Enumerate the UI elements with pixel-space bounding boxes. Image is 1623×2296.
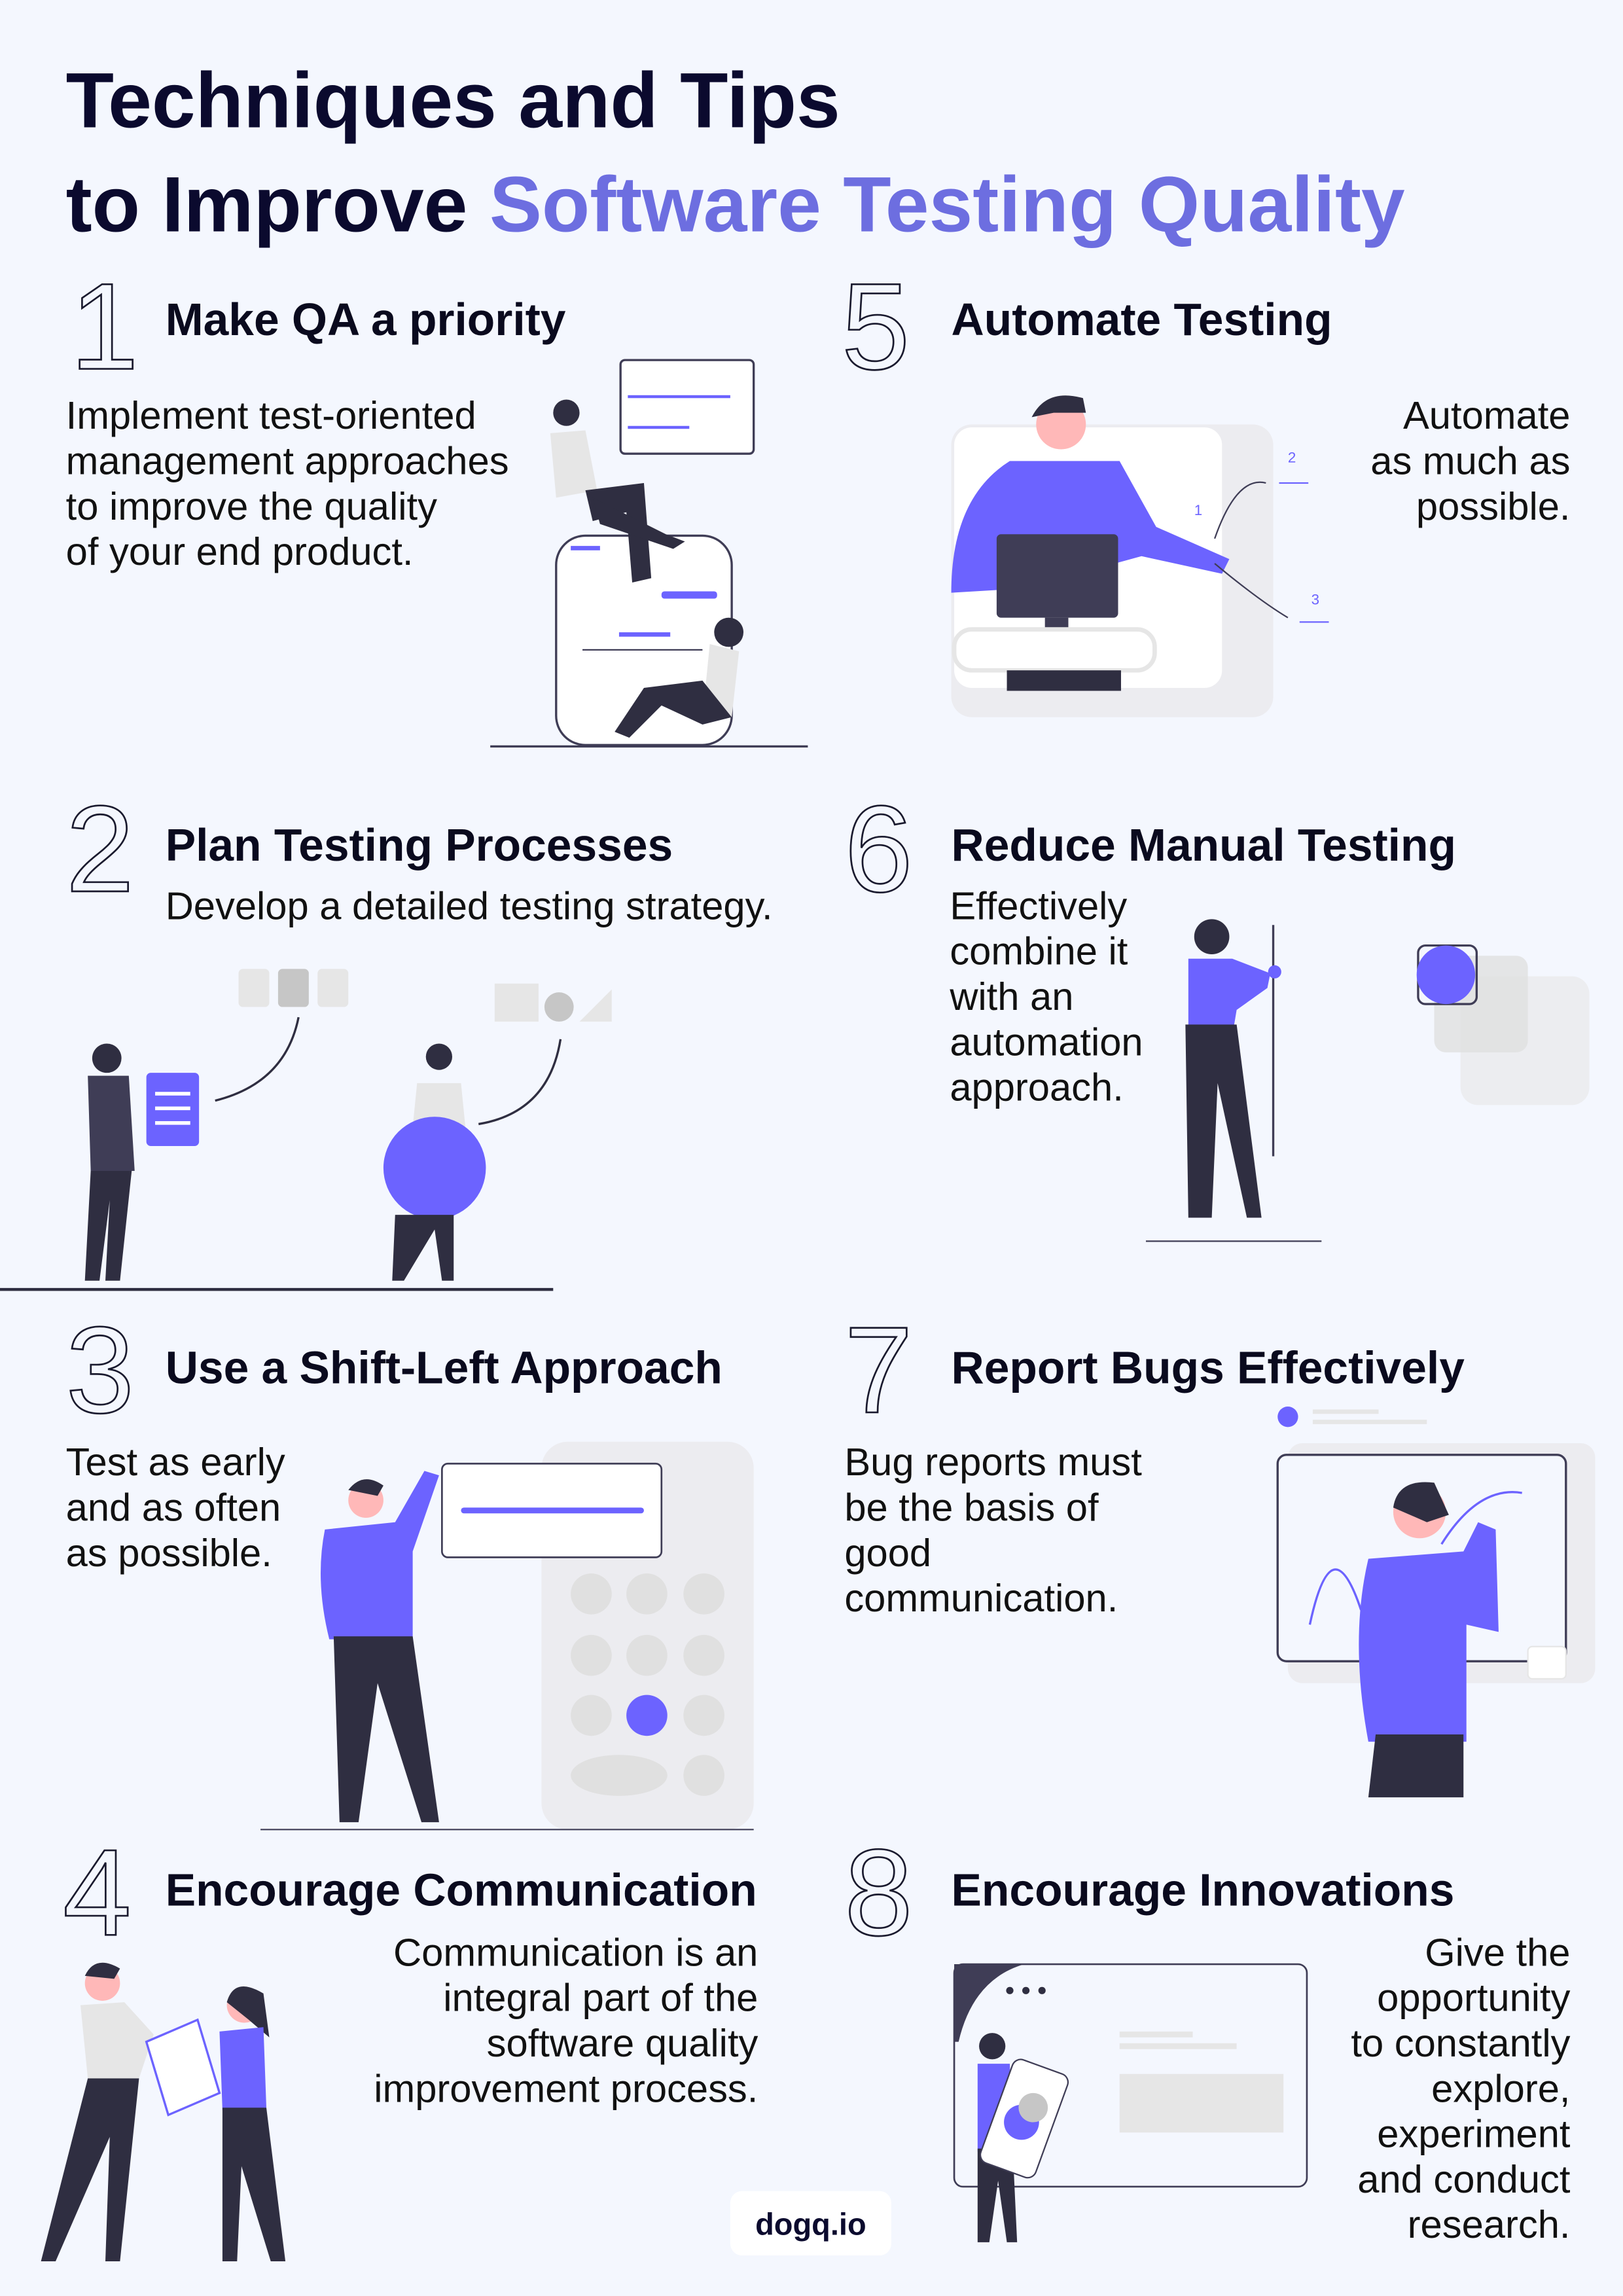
- logo badge: [730, 2191, 891, 2255]
- illustration 5: 1: [1194, 502, 1202, 518]
- illustration 4: [41, 1963, 285, 2261]
- illustration 8: [954, 1964, 1307, 2242]
- text 6: automation: [950, 1020, 1143, 1064]
- number 8: 8: [844, 1823, 913, 1961]
- text 6: combine it: [950, 929, 1128, 973]
- title: Techniques and Tips: [66, 57, 840, 145]
- number 2: 2: [66, 780, 134, 918]
- text 2: Develop a detailed testing strategy.: [166, 884, 773, 927]
- number 6: 6: [844, 780, 913, 918]
- text 5: possible.: [1416, 484, 1570, 528]
- heading 5: Automate Testing: [952, 294, 1332, 345]
- text 6: Effectively: [950, 884, 1127, 927]
- number 7: 7: [844, 1301, 913, 1439]
- text 4: Communication is an: [393, 1930, 758, 1974]
- text 1: management approaches: [66, 439, 509, 483]
- illustration 7: [1277, 1407, 1596, 1797]
- section 6: [844, 780, 1590, 1241]
- text 7: be the basis of: [844, 1485, 1099, 1529]
- illustration 5: 2: [1288, 450, 1296, 466]
- text 1: of your end product.: [66, 529, 414, 573]
- text 7: Bug reports must: [844, 1440, 1142, 1484]
- section 2: [0, 780, 773, 1289]
- text 8: explore,: [1431, 2066, 1570, 2110]
- heading 7: Report Bugs Effectively: [952, 1342, 1465, 1393]
- text 3: and as often: [66, 1485, 281, 1529]
- text 8: to constantly: [1351, 2021, 1571, 2065]
- text 4: integral part of the: [443, 1976, 758, 2020]
- text 4: software quality: [487, 2021, 758, 2065]
- text 8: research.: [1408, 2202, 1570, 2246]
- section 3: [66, 1301, 754, 1829]
- text 8: Give the: [1425, 1930, 1570, 1974]
- heading 2: Plan Testing Processes: [166, 819, 673, 870]
- text 6: with an: [949, 975, 1073, 1018]
- text 3: Test as early: [66, 1440, 285, 1484]
- text 7: communication.: [844, 1576, 1118, 1620]
- section 1: [66, 258, 808, 746]
- text 1: Implement test-oriented: [66, 393, 476, 437]
- number 4: 4: [63, 1823, 132, 1961]
- number 1: 1: [70, 258, 139, 395]
- illustration 3: [260, 1442, 754, 1829]
- illustration 1: [490, 360, 808, 746]
- section 4: [41, 1823, 758, 2261]
- illustration 2: [0, 969, 612, 1289]
- illustration 5: [952, 395, 1329, 717]
- title: [66, 57, 1405, 248]
- section 8: [844, 1823, 1571, 2246]
- text 5: as much as: [1370, 439, 1570, 483]
- text 3: as possible.: [66, 1531, 272, 1575]
- text 6: approach.: [950, 1066, 1124, 1109]
- text 8: and conduct: [1357, 2157, 1571, 2201]
- text 5: Automate: [1403, 393, 1570, 437]
- number 3: 3: [66, 1301, 134, 1439]
- text 8: opportunity: [1377, 1976, 1571, 2020]
- heading 3: Use a Shift-Left Approach: [166, 1342, 722, 1393]
- number 5: 5: [842, 258, 910, 395]
- title: to Improve Software Testing Quality: [66, 160, 1405, 248]
- heading 8: Encourage Innovations: [952, 1865, 1454, 1916]
- heading 4: Encourage Communication: [166, 1865, 757, 1916]
- section 5: [842, 258, 1570, 717]
- illustration 6: [1146, 919, 1590, 1241]
- text 7: good: [844, 1531, 931, 1575]
- text 4: improvement process.: [374, 2066, 758, 2110]
- illustration 5: 3: [1311, 592, 1319, 608]
- section 7: [844, 1301, 1596, 1797]
- logo badge: dogq.io: [755, 2207, 866, 2242]
- heading 1: Make QA a priority: [166, 294, 566, 345]
- text 8: experiment: [1377, 2112, 1571, 2156]
- heading 6: Reduce Manual Testing: [952, 819, 1456, 870]
- text 1: to improve the quality: [66, 484, 437, 528]
